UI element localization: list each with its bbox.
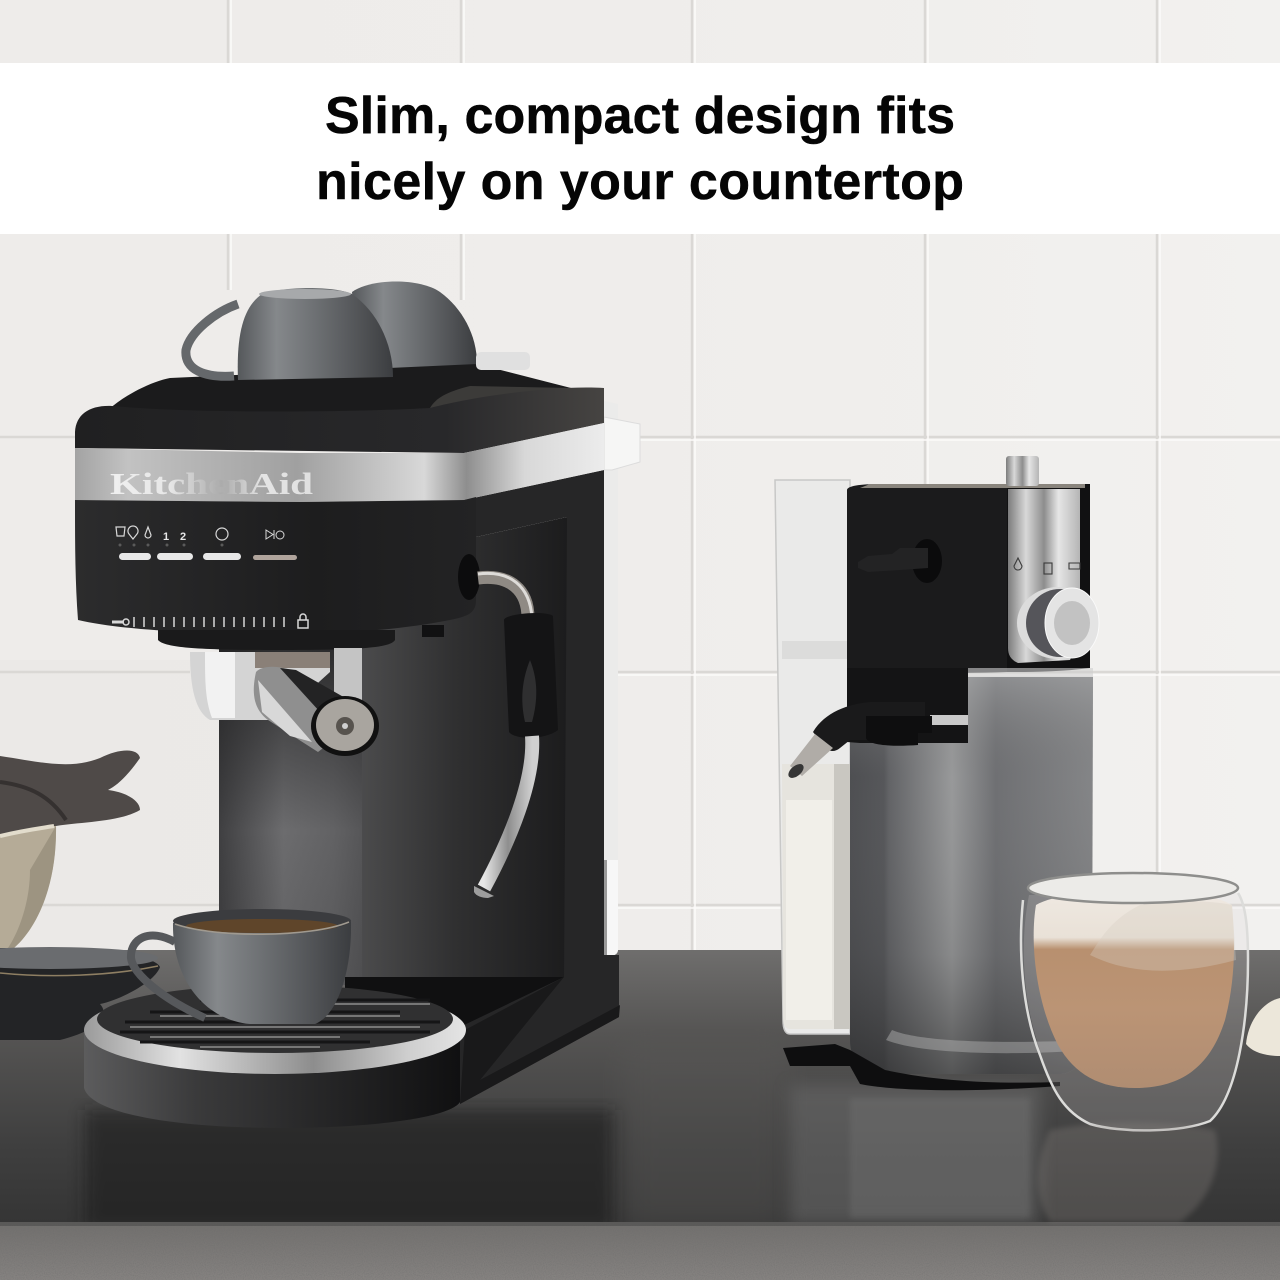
towel, bowl and plates at left xyxy=(0,750,160,1040)
top pin xyxy=(1006,456,1039,486)
clear rear tank xyxy=(775,480,850,1034)
steam wand lower xyxy=(484,736,532,888)
milk frother attachment xyxy=(775,456,1099,1218)
connector xyxy=(858,539,942,583)
drip tray grate xyxy=(97,985,453,1053)
saucer at right edge xyxy=(1246,998,1280,1056)
drip tray steel rim xyxy=(84,986,466,1074)
carafe body xyxy=(850,677,1093,1074)
heading band xyxy=(0,63,1280,234)
rear cup xyxy=(352,282,477,378)
clear water tank on the right side xyxy=(600,400,618,957)
logo: KitchenAid xyxy=(110,466,313,501)
countertop xyxy=(0,950,1280,1280)
lid xyxy=(108,364,600,414)
steel band xyxy=(75,423,604,502)
tiled wall background xyxy=(0,0,1280,960)
base foot xyxy=(783,1044,1060,1090)
heading band: nicely on your countertop xyxy=(316,153,964,211)
frother spout xyxy=(813,702,925,751)
central column xyxy=(219,640,362,985)
portafilter xyxy=(190,648,379,756)
dial scale xyxy=(112,614,308,628)
drip tray base xyxy=(84,1030,460,1128)
right body and base wedge xyxy=(460,470,619,1104)
espresso machine xyxy=(75,282,640,1128)
tiny icons on panel xyxy=(1014,558,1080,574)
steam wand upper xyxy=(478,577,528,618)
control panel icons: 1 xyxy=(163,531,169,543)
knob xyxy=(1017,587,1099,659)
lower collar xyxy=(847,668,968,743)
glass reflection on counter xyxy=(1038,1122,1218,1222)
heading text: Slim, compact design fits xyxy=(325,87,955,145)
stacked cups on the lid xyxy=(186,288,530,380)
steel panel xyxy=(1008,489,1080,663)
inner cavity xyxy=(362,517,567,985)
steam sleeve xyxy=(504,613,558,738)
head top rim xyxy=(75,387,604,453)
frother counter reflection xyxy=(850,1098,1030,1218)
cavity floor xyxy=(345,977,564,1030)
control head xyxy=(75,497,476,634)
milk xyxy=(782,764,850,1029)
group head under control head xyxy=(158,630,395,650)
steam knob xyxy=(458,554,480,600)
top dark head xyxy=(847,484,1007,673)
espresso cup xyxy=(131,909,351,1024)
control panel icons: 2 xyxy=(180,531,186,543)
control panel icons xyxy=(116,526,297,560)
latte glass xyxy=(1021,873,1280,1222)
